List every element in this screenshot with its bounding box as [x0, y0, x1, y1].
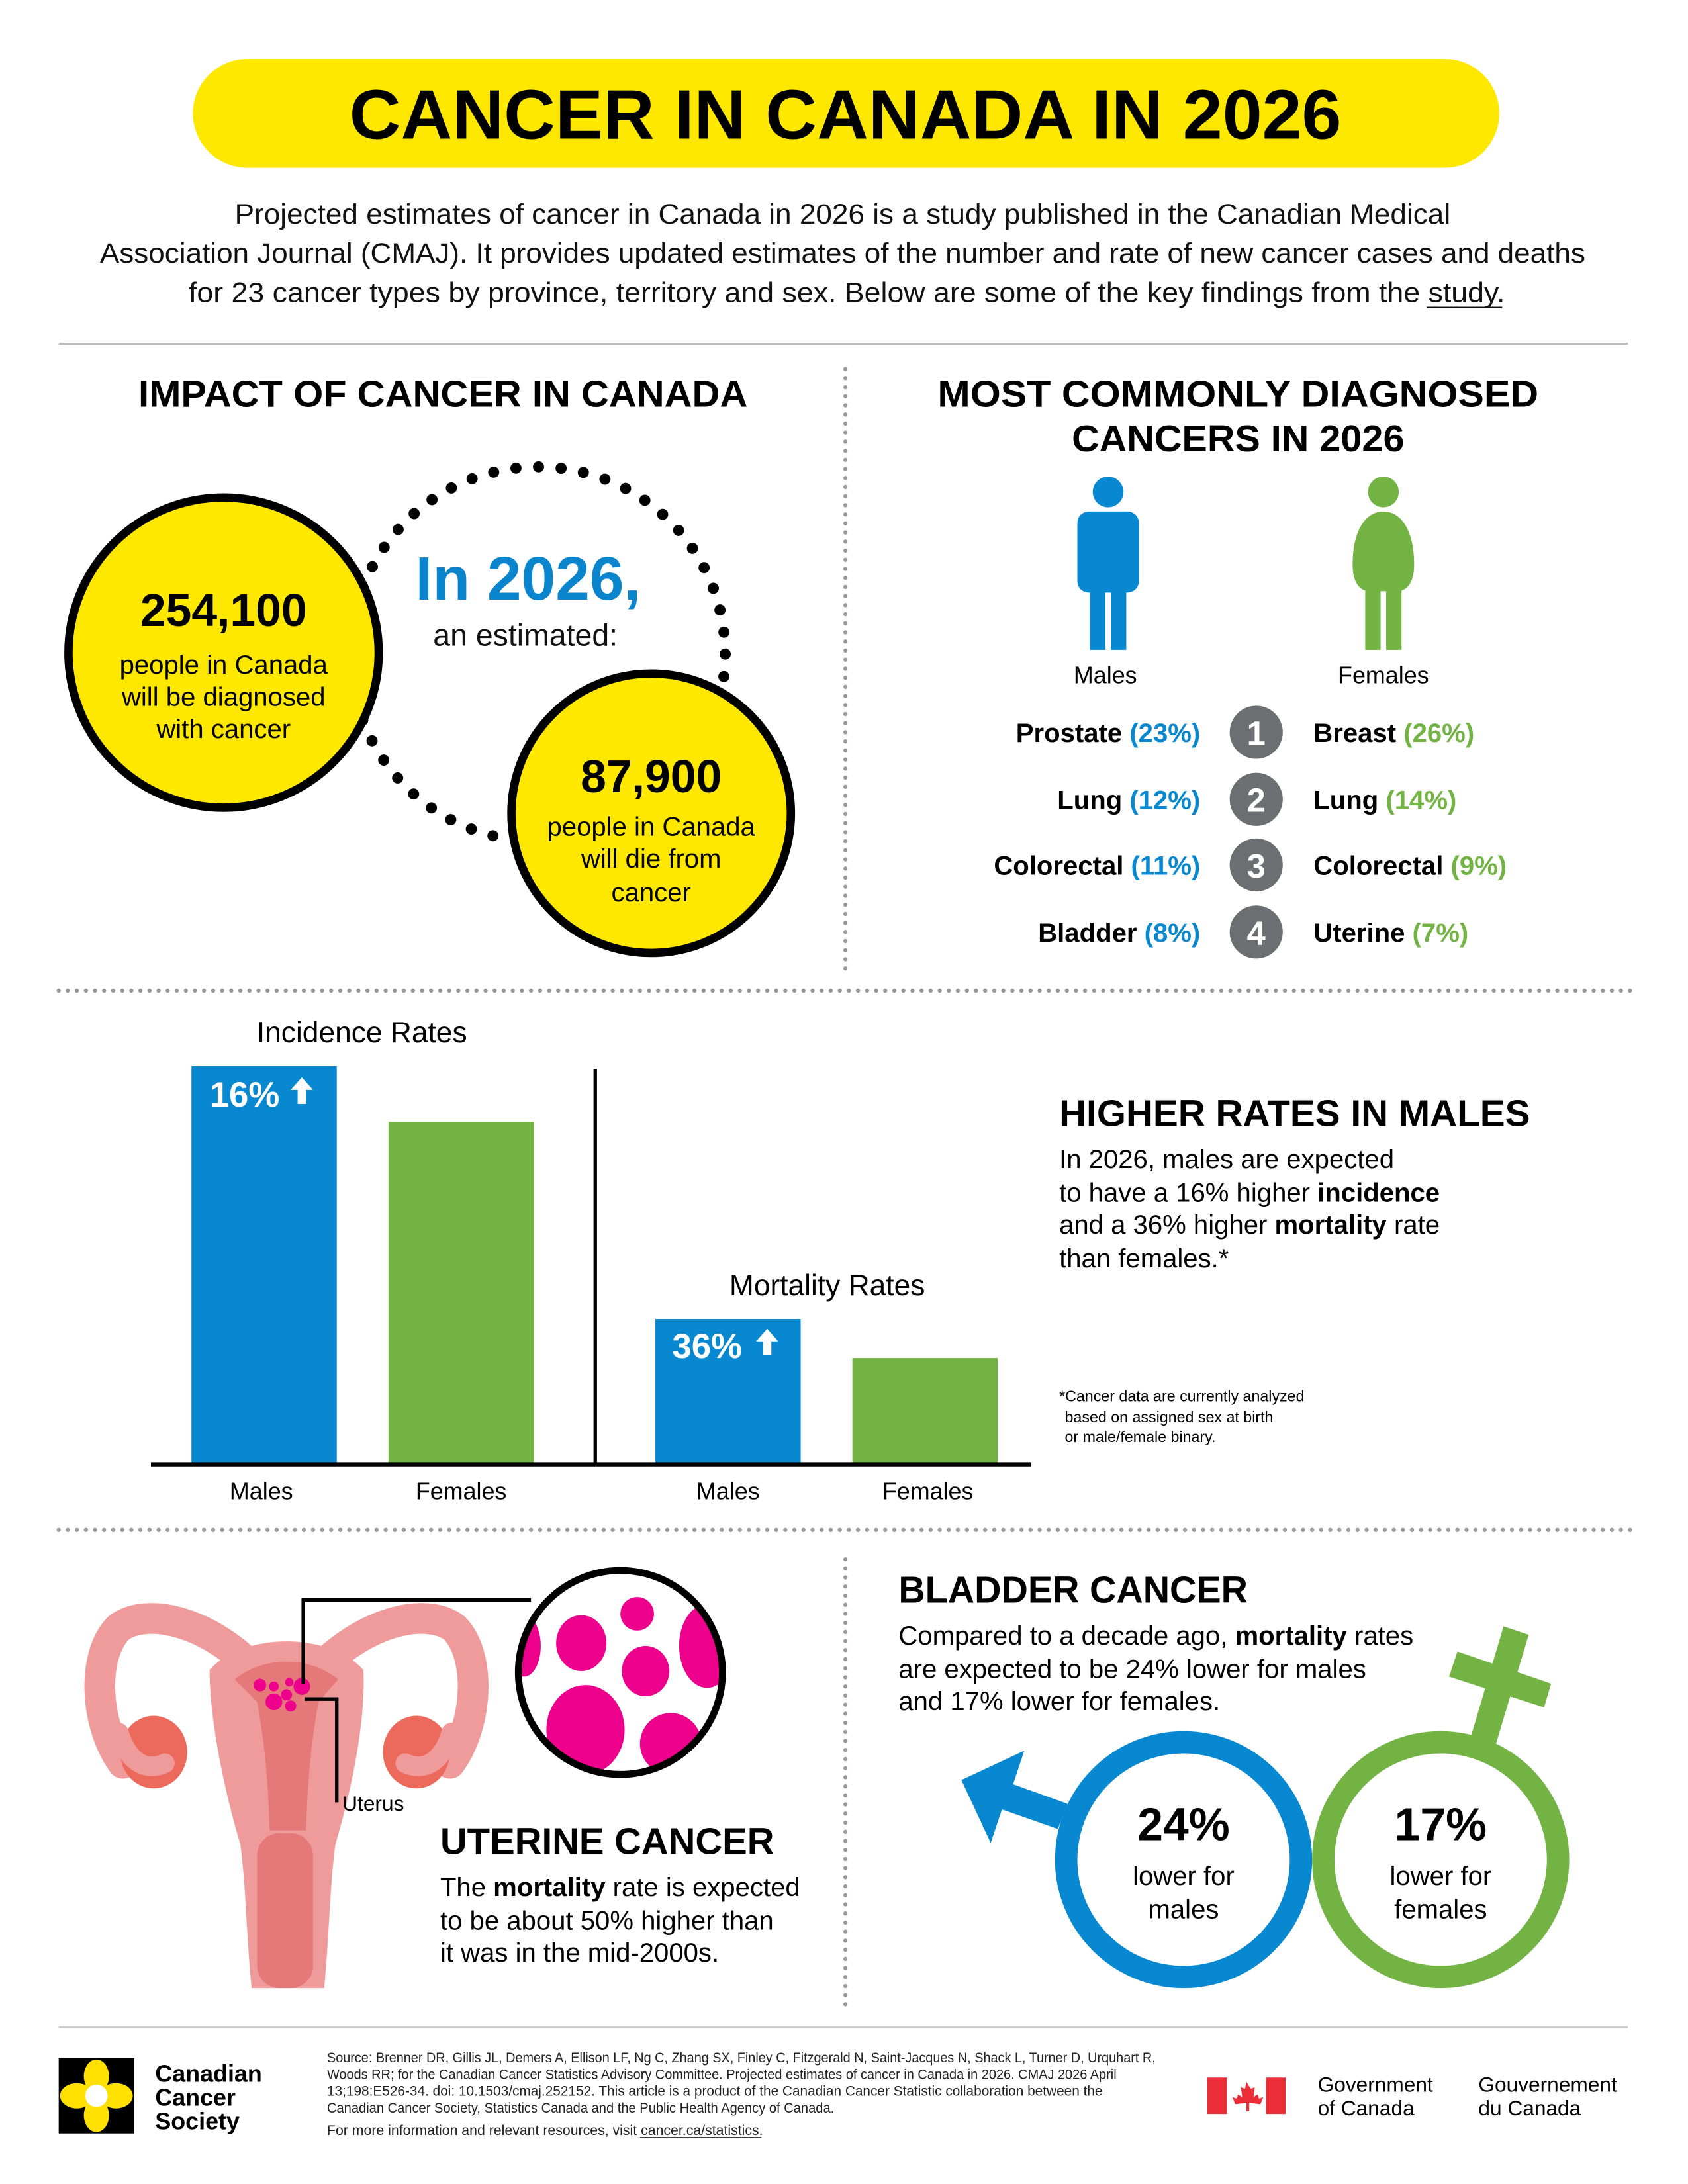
text: uterine body: The mortality rate is expected	[440, 1873, 800, 1902]
circle: deaths: cancer	[612, 878, 691, 907]
circle: diagnosed: with cancer	[156, 715, 291, 744]
ranking list: 3	[1247, 847, 1266, 885]
text: higher rates body: than females.*	[1059, 1244, 1229, 1273]
heading: uterine cancer: UTERINE CANCER	[440, 1821, 774, 1863]
logo: canadian cancer society: Canadian	[155, 2061, 262, 2087]
text: uterine body: it was in the mid-2000s.	[440, 1938, 719, 1968]
text: higher rates body	[1059, 1145, 1440, 1273]
bar chart: incidence and mortality: Mortality Rates	[729, 1269, 925, 1302]
heading: most commonly diagnosed: CANCERS IN 2026	[1072, 418, 1404, 460]
government wordmark: of Canada	[1318, 2096, 1415, 2120]
source text: Woods RR; for the Canadian Cancer Statistics Advisory Committee. Projected estimates of cancer in Canada in 2026. CMAJ 2026 April	[327, 2067, 1117, 2082]
footnote: based on assigned sex at birth	[1065, 1408, 1273, 1426]
intro paragraph: Association Journal (CMAJ). It provides updated estimates of the number and rate of new cancer cases and deaths	[100, 238, 1585, 269]
ranking list	[994, 705, 1507, 958]
in 2026 label: In 2026,	[416, 544, 641, 613]
source text: Canadian Cancer Society, Statistics Canada and the Public Health Agency of Canada.	[327, 2101, 834, 2116]
source text: Source: Brenner DR, Gillis JL, Demers A, Ellison LF, Ng C, Zhang SX, Finley C, Fitzgerald N, Saint-Jacques N, Shack L, Turner D, Urquhart R,	[327, 2050, 1156, 2066]
label: uterus: Uterus	[342, 1792, 404, 1815]
government wordmark: Government	[1318, 2072, 1433, 2096]
heading: most commonly diagnosed	[937, 373, 1538, 460]
illustration: uterus	[100, 1618, 473, 1988]
ranking list: 2	[1247, 782, 1266, 819]
ranking list: 4	[1247, 914, 1266, 952]
ranking list: Prostate (23%)	[1016, 719, 1200, 748]
government wordmark	[1318, 2072, 1617, 2120]
text: uterine body: to be about 50% higher than	[440, 1907, 774, 1936]
bar chart: incidence and mortality: Incidence Rates	[257, 1017, 467, 1049]
circle: diagnosed: 254,100	[140, 584, 307, 636]
bar chart: incidence and mortality: Females	[882, 1478, 973, 1504]
icon: male symbol 24%	[961, 1743, 1301, 1977]
ranking list: Bladder (8%)	[1038, 919, 1200, 948]
circle: deaths: people in Canada	[547, 813, 756, 842]
intro paragraph	[100, 199, 1585, 308]
bar chart: incidence and mortality: 16%	[210, 1075, 279, 1115]
heading: impact of cancer: IMPACT OF CANCER IN CANADA	[138, 373, 747, 416]
footnote: or male/female binary.	[1065, 1428, 1216, 1445]
callout line to magnifier	[303, 1600, 531, 1802]
text: higher rates body: In 2026, males are expected	[1059, 1145, 1394, 1174]
magnified cells circle	[507, 1570, 735, 1774]
bar chart: incidence and mortality: Males	[696, 1478, 760, 1504]
circle: deaths: 87,900	[581, 751, 722, 802]
icon: female symbol 17%: lower for	[1389, 1862, 1491, 1891]
bar chart: incidence and mortality: Males	[230, 1478, 293, 1504]
bar chart: incidence and mortality: Females	[416, 1478, 506, 1504]
icon: female figure	[1352, 477, 1414, 650]
in 2026 label: an estimated:	[433, 618, 618, 653]
ranking list: Colorectal (9%)	[1313, 852, 1507, 881]
circle: diagnosed	[68, 498, 379, 807]
logo: canadian cancer society	[59, 2058, 262, 2134]
in 2026 label	[402, 538, 661, 657]
text: higher rates body: to have a 16% higher incidence	[1059, 1179, 1440, 1208]
icon: female symbol 17%: females	[1394, 1895, 1487, 1925]
circle: deaths: will die from	[581, 844, 722, 874]
icon: male symbol 24%: lower for	[1133, 1862, 1235, 1891]
text: higher rates body: and a 36% higher mortality rate	[1059, 1210, 1440, 1240]
text: bladder body: Compared to a decade ago, mortality rates	[898, 1621, 1413, 1651]
logo: government of canada flag	[1207, 2077, 1286, 2114]
circle: deaths	[512, 674, 791, 953]
heading: most commonly diagnosed: MOST COMMONLY DIAGNOSED	[937, 373, 1538, 416]
text: uterine body	[440, 1873, 800, 1968]
government wordmark: du Canada	[1478, 2096, 1581, 2120]
ranking list: Lung (12%)	[1057, 786, 1200, 815]
circle: diagnosed: people in Canada	[120, 651, 328, 680]
icon: female symbol 17%: 17%	[1395, 1798, 1487, 1850]
logo: canadian cancer society: Cancer	[155, 2084, 236, 2111]
heading: bladder cancer: BLADDER CANCER	[898, 1569, 1248, 1612]
icon: male symbol 24%: 24%	[1137, 1798, 1230, 1850]
ranking list: Lung (14%)	[1313, 786, 1456, 815]
ranking list: Uterine (7%)	[1313, 919, 1468, 948]
government wordmark: Gouvernement	[1478, 2072, 1617, 2096]
ranking list: Breast (26%)	[1313, 719, 1474, 748]
source text	[327, 2050, 1156, 2138]
source text: For more information and relevant resources, visit cancer.ca/statistics.	[327, 2123, 763, 2138]
intro paragraph: for 23 cancer types by province, territory and sex. Below are some of the key findings from the study.	[189, 277, 1505, 308]
text: bladder body: and 17% lower for females.	[898, 1687, 1220, 1716]
ranking list: Colorectal (11%)	[994, 852, 1200, 881]
dotted ring	[351, 467, 726, 841]
source text: 13;198:E526-34. doi: 10.1503/cmaj.252152. This article is a product of the Canadian Cancer Statistic collaboration between the	[327, 2084, 1103, 2099]
labels males/females	[1074, 662, 1429, 689]
ranking list: 1	[1247, 714, 1266, 752]
intro paragraph: Projected estimates of cancer in Canada in 2026 is a study published in the Canadian Medical	[235, 199, 1450, 230]
icon: female symbol 17%	[1323, 1626, 1558, 1977]
bar chart: incidence and mortality: 36%	[672, 1327, 742, 1366]
title banner: CANCER IN CANADA IN 2026	[350, 75, 1341, 154]
icon: male symbol 24%: males	[1148, 1895, 1219, 1925]
labels males/females: Females	[1338, 662, 1429, 689]
labels males/females: Males	[1074, 662, 1137, 689]
heading: higher rates in males: HIGHER RATES IN MALES	[1059, 1093, 1530, 1135]
footnote: *Cancer data are currently analyzed	[1059, 1388, 1305, 1405]
footnote	[1059, 1388, 1305, 1445]
text: bladder body	[898, 1621, 1413, 1716]
circle: diagnosed: will be diagnosed	[121, 682, 326, 711]
bar chart: incidence and mortality	[151, 1017, 1031, 1504]
logo: canadian cancer society: Society	[155, 2108, 240, 2134]
text: bladder body: are expected to be 24% lower for males	[898, 1655, 1366, 1684]
icon: male figure	[1078, 477, 1139, 650]
title banner	[193, 59, 1499, 168]
